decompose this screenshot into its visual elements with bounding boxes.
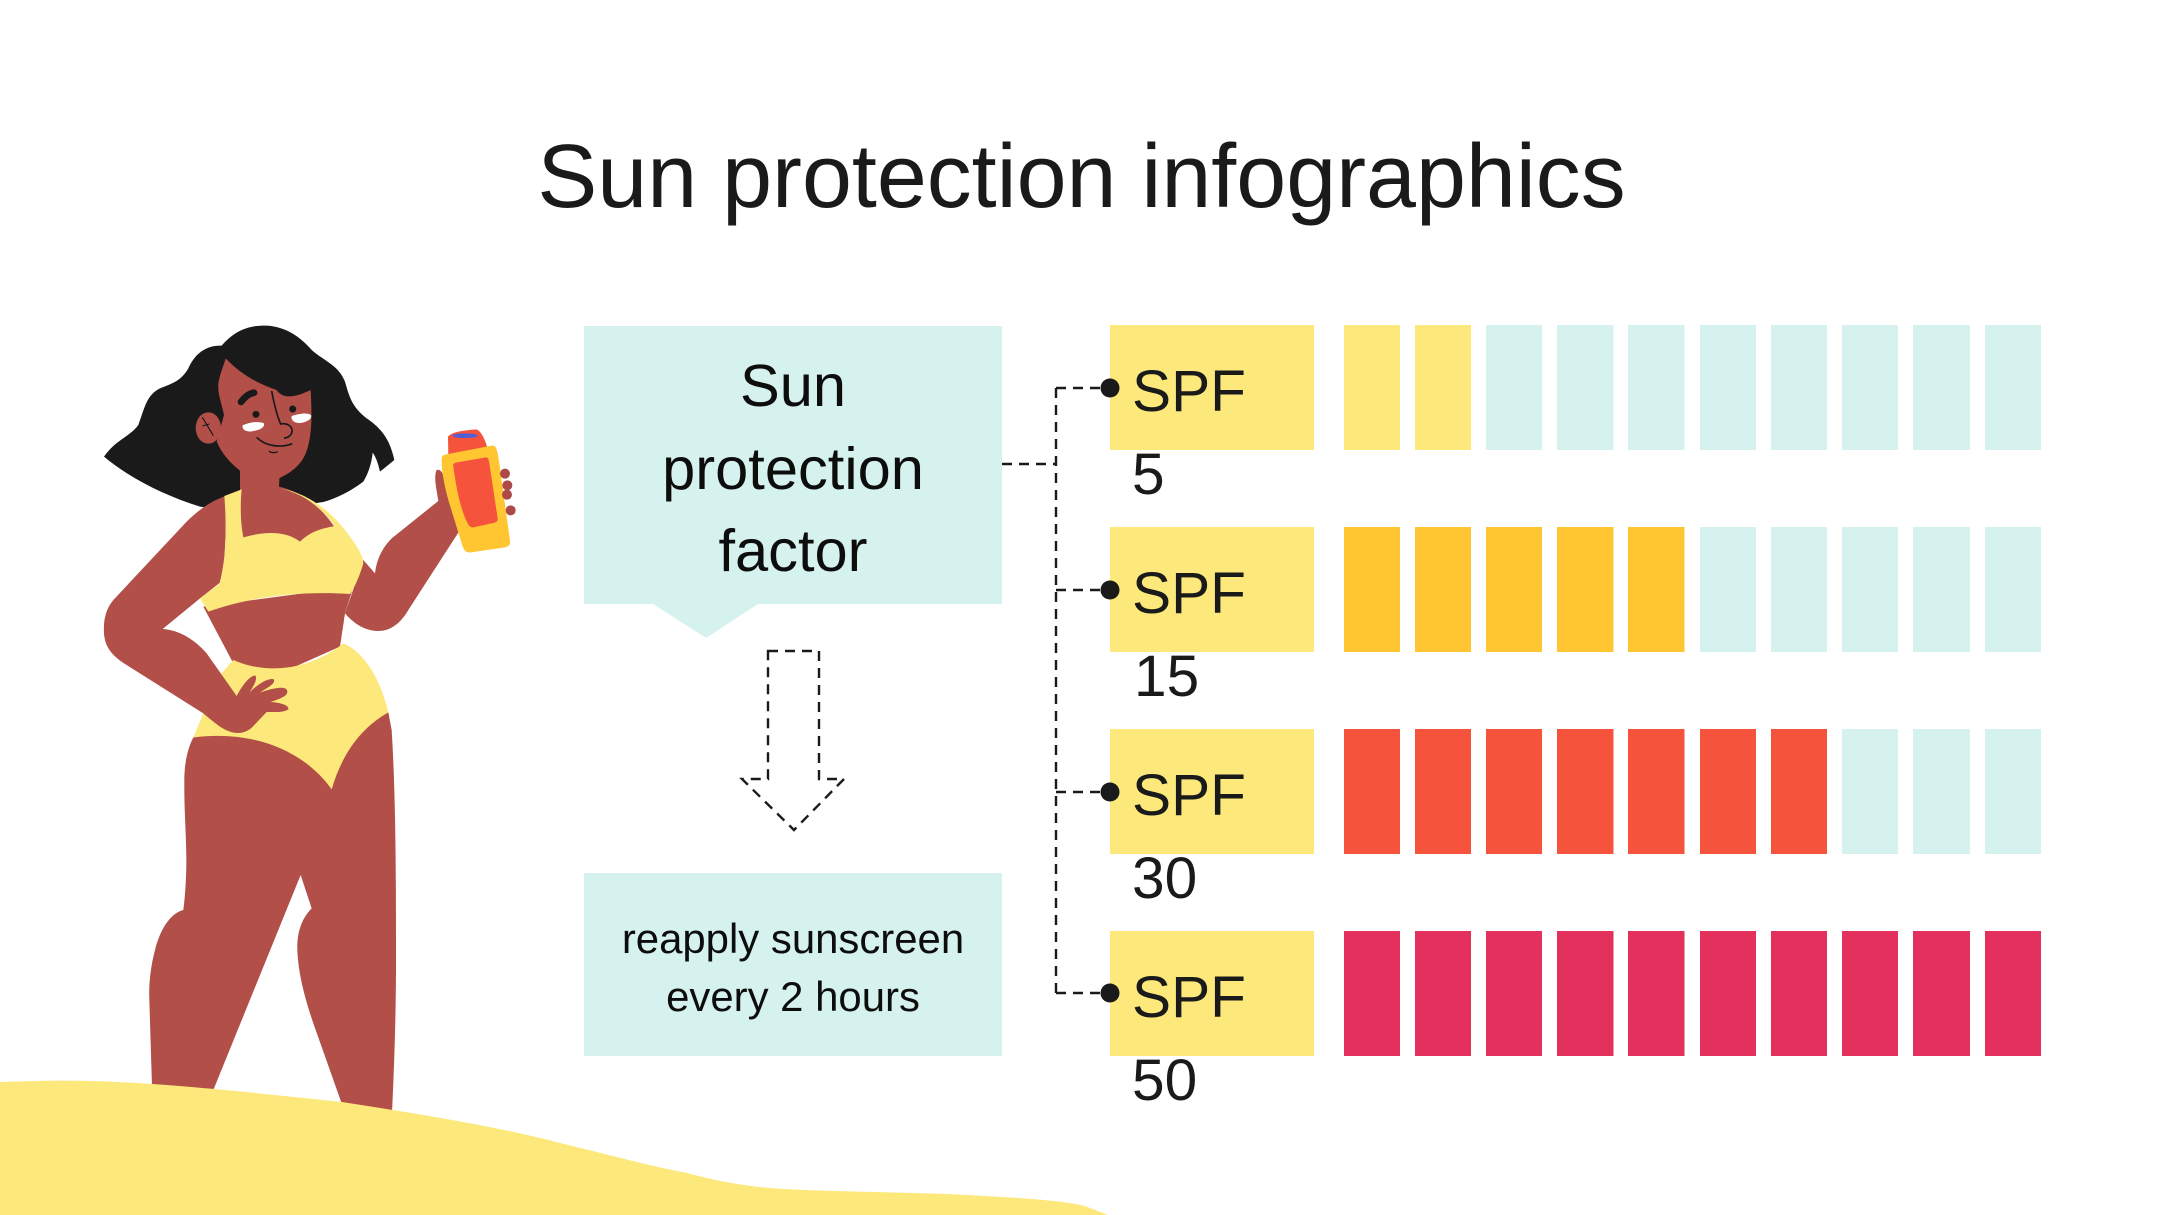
torso midriff: [203, 587, 353, 673]
sand hill: [0, 1081, 1108, 1215]
SPF 15 dot: [1100, 580, 1120, 600]
reapply text: reapply sunscreen: [622, 915, 964, 962]
SPF 30 label: 30: [1132, 846, 1197, 911]
SPF 15 label: SPF: [1132, 561, 1246, 626]
eyebrow: [241, 393, 254, 402]
neck and chest: [240, 467, 337, 545]
callout text: Sun: [740, 352, 846, 419]
SPF 50 dot: [1100, 984, 1120, 1002]
eye left: [252, 411, 259, 418]
illustration: woman holding sunscreen: [104, 326, 516, 1113]
bikini top: [200, 488, 363, 612]
SPF 50 label box: [1110, 931, 1314, 1056]
mouth: [257, 437, 292, 446]
SPF 5 dot: [1100, 378, 1120, 398]
sunscreen on right cheek: [292, 413, 311, 423]
lower lip: [269, 451, 278, 453]
callout: sun protection factor: [584, 326, 1002, 638]
ear: [196, 412, 221, 444]
title: Sun protection infographics: [537, 127, 1626, 227]
fingers: [500, 469, 516, 515]
legs: [149, 712, 396, 1113]
bottle body: [442, 446, 510, 552]
row: SPF 30: [1100, 729, 2041, 911]
SPF 15 bars: [1344, 527, 2041, 652]
bikini bottom: [193, 643, 388, 789]
row: SPF 50: [1100, 931, 2041, 1113]
reapply text: [622, 915, 964, 1020]
callout text: factor: [718, 517, 868, 584]
hair: [104, 326, 394, 513]
sunscreen on left cheek: [243, 422, 264, 431]
callout box: [584, 326, 1002, 638]
row: SPF 5: [1100, 325, 2041, 507]
dashed arrow: [742, 651, 844, 830]
SPF 5 label box: [1110, 325, 1314, 450]
eye right: [289, 405, 296, 412]
reapply text: every 2 hours: [666, 973, 920, 1020]
reapply background: [584, 873, 1002, 1056]
bottle cap: [448, 429, 487, 457]
face: [217, 358, 311, 478]
reapply box: [584, 873, 1002, 1056]
ear detail: [202, 417, 213, 436]
SPF 15 label: 15: [1134, 644, 1199, 709]
SPF 30 dot: [1100, 782, 1120, 802]
callout text: protection: [662, 435, 924, 502]
left arm on hip: [104, 496, 288, 733]
SPF 50 bars: [1344, 931, 2041, 1056]
SPF 50 label: 50: [1132, 1048, 1197, 1113]
bottle label: [453, 457, 498, 527]
SPF 15 label box: [1110, 527, 1314, 652]
cap highlight: [452, 433, 478, 438]
SPF 30 bars: [1344, 729, 2041, 854]
SPF 5 bars: [1344, 325, 2041, 450]
SPF 30 label: SPF: [1132, 763, 1246, 828]
dashed connector: [1002, 388, 1104, 993]
right arm holding bottle: [345, 470, 460, 631]
callout text: [662, 352, 924, 584]
row: SPF 15: [1100, 527, 2041, 709]
SPF 5 label: SPF: [1132, 359, 1246, 424]
SPF 30 label box: [1110, 729, 1314, 854]
nose: [272, 391, 292, 438]
SPF 50 label: SPF: [1132, 965, 1246, 1030]
SPF 5 label: 5: [1132, 442, 1165, 507]
bottle: [442, 429, 510, 552]
